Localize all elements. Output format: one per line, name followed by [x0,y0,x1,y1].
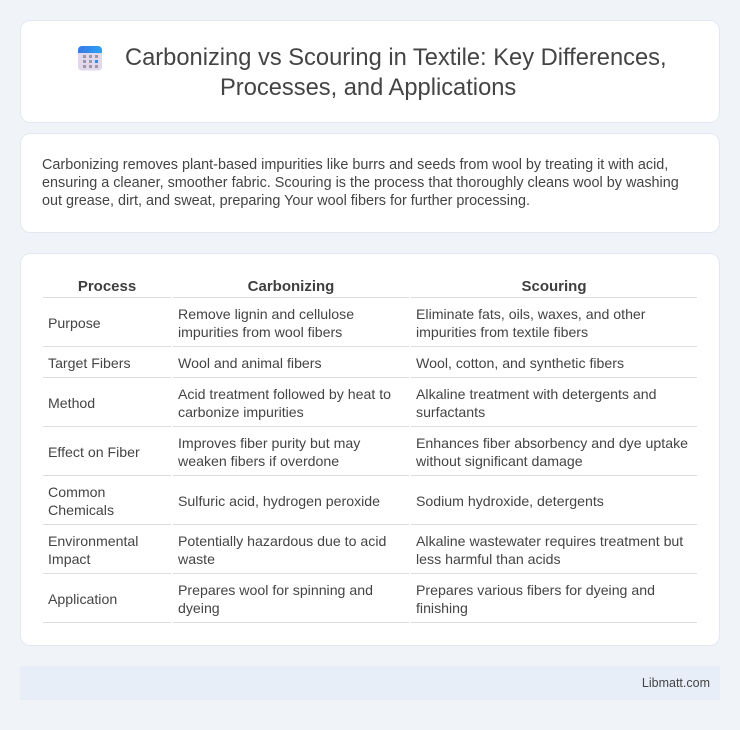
method carbonizing: Acid treatment followed by heat to [178,386,391,402]
row: environmental impact [48,533,138,567]
heading [125,45,667,101]
heading: Processes, and Applications [220,75,516,101]
header: scouring: Scouring [521,278,586,295]
row: method: Method [48,395,95,411]
purpose scouring: impurities from textile fibers [416,324,588,340]
application scouring: finishing [416,600,468,616]
title card [20,20,720,123]
intro text: Carbonizing removes plant-based impurities like burrs and seeds from wool by treating it with acid, [42,157,668,173]
header: process: Process [78,278,136,295]
method carbonizing: carbonize impurities [178,404,304,420]
impact carbonizing: waste [178,551,215,567]
method scouring: Alkaline treatment with detergents and [416,386,657,402]
application carbonizing: dyeing [178,600,220,616]
application carbonizing: Prepares wool for spinning and [178,582,373,598]
method carbonizing [178,386,391,420]
effect carbonizing: Improves fiber purity but may [178,435,360,451]
purpose carbonizing: impurities from wool fibers [178,324,342,340]
target scouring: Wool, cotton, and synthetic fibers [416,355,624,371]
application scouring: Prepares various fibers for dyeing and [416,582,655,598]
purpose scouring: Eliminate fats, oils, waxes, and other [416,306,646,322]
row: common chemicals [48,484,114,518]
icon: calendar [78,46,102,70]
effect scouring: without significant damage [416,453,583,469]
row: effect on fiber: Effect on Fiber [48,444,140,460]
purpose carbonizing [178,306,354,340]
intro card [20,133,720,233]
table card [20,253,720,646]
effect scouring [416,435,688,469]
impact carbonizing [178,533,386,567]
row: environmental impact: Impact [48,551,90,567]
chemicals carbonizing: Sulfuric acid, hydrogen peroxide [178,493,380,509]
chemicals scouring: Sodium hydroxide, detergents [416,493,604,509]
method scouring: surfactants [416,404,485,420]
heading: Carbonizing vs Scouring in Textile: Key Differences, [125,45,667,71]
row: common chemicals: Chemicals [48,502,114,518]
row: application: Application [48,591,117,607]
intro text [42,157,679,209]
row: purpose: Purpose [48,315,101,331]
purpose carbonizing: Remove lignin and cellulose [178,306,354,322]
application carbonizing [178,582,373,616]
effect carbonizing: weaken fibers if overdone [178,453,339,469]
impact scouring: less harmful than acids [416,551,561,567]
row: common chemicals: Common [48,484,105,500]
intro text: ensuring a cleaner, smoother fabric. Scouring is the process that thoroughly cleans wool by washing [42,175,679,191]
method scouring [416,386,657,420]
target carbonizing: Wool and animal fibers [178,355,322,371]
purpose scouring [416,306,646,340]
row: target fibers: Target Fibers [48,355,131,371]
row: environmental impact: Environmental [48,533,138,549]
effect carbonizing [178,435,360,469]
footer bar [20,666,720,700]
header: carbonizing: Carbonizing [248,278,334,295]
impact carbonizing: Potentially hazardous due to acid [178,533,386,549]
effect scouring: Enhances fiber absorbency and dye uptake [416,435,688,451]
footer text: Libmatt.com [642,676,710,690]
intro text: out grease, dirt, and sweat, preparing Your wool fibers for further processing. [42,193,530,209]
impact scouring: Alkaline wastewater requires treatment but [416,533,683,549]
impact scouring [416,533,684,567]
application scouring [416,582,655,616]
